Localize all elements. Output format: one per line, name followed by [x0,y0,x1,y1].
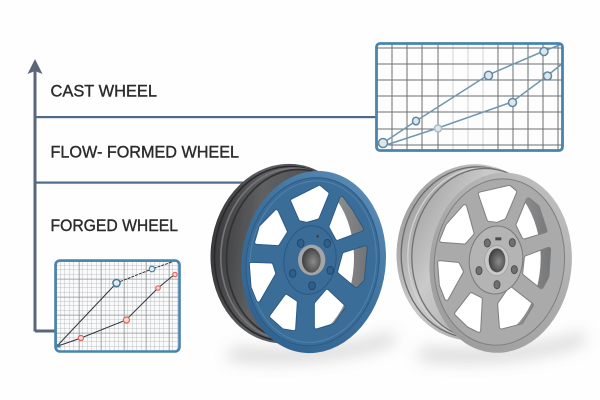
barrel: dark rim [202,156,374,351]
label: flow-formed wheel: FLOW- FORMED WHEEL [50,144,239,162]
connector: cast wheel line [35,116,377,118]
connector: forged chart to axis [35,330,57,332]
wheel shadow: gray wheel [415,333,586,361]
wheel: blue flow-formed wheel [210,164,386,354]
connector: flow-formed wheel line [35,182,255,184]
hub [280,223,340,297]
label: cast wheel: CAST WHEEL [50,83,157,101]
chart: forged wheel curves [56,260,180,352]
face: spokes and rim [241,170,386,354]
barrel: silver rim [388,156,562,348]
face: spokes and rim [430,172,572,353]
chart: cast wheel curves [376,44,563,150]
hub [466,223,526,297]
wheel shadow: blue wheel [225,333,396,361]
label: forged wheel: FORGED WHEEL [50,217,178,235]
wheel: silver forged wheel [396,164,572,353]
axis arrow [28,59,42,332]
